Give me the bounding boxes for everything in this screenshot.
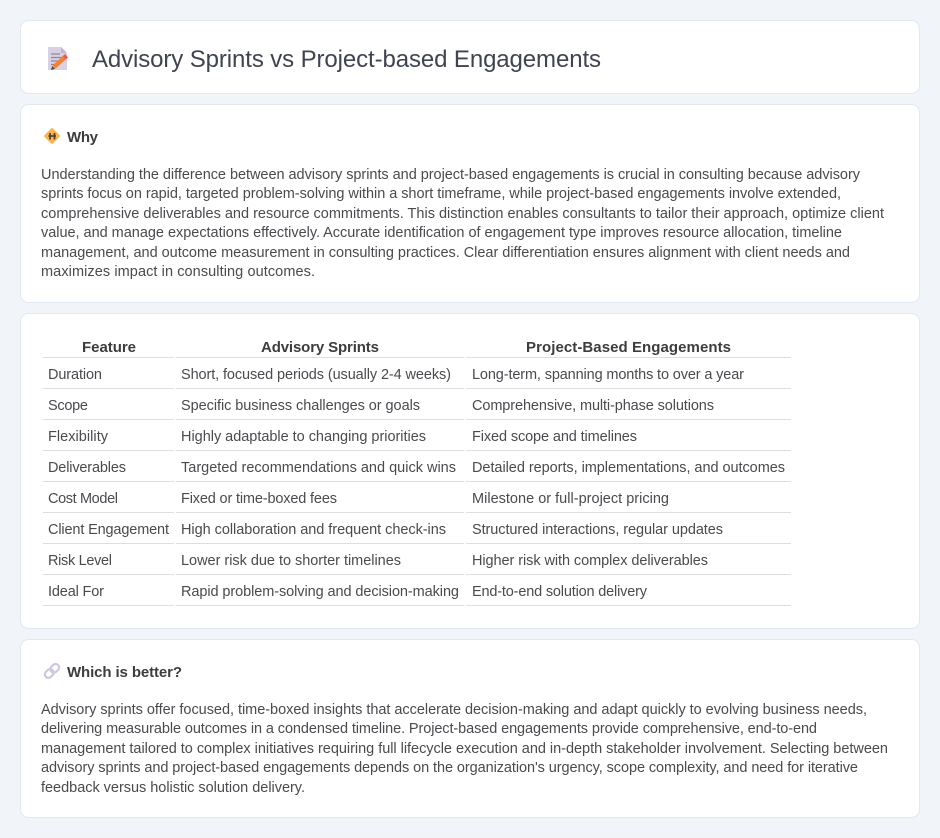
text block: which is better explanation: advisory sprints and project-based engagements depends on the organization's urgency, scope complexity, and need for iterative — [41, 760, 858, 776]
icon: chain link — [43, 662, 61, 679]
icon: warning diamond — [44, 128, 60, 144]
heading: which is better: Which is better? — [67, 664, 182, 681]
row: risk level: Risk Level — [48, 553, 112, 569]
row: risk level: Higher risk with complex deliverables — [472, 553, 708, 569]
row: cost model — [43, 491, 791, 513]
row: flexibility: Flexibility — [48, 429, 109, 445]
row: ideal for: Ideal For — [48, 584, 104, 600]
panel: which is better — [20, 640, 920, 818]
row: client engagement: Client Engagement — [48, 522, 169, 538]
row: duration: Long-term, spanning months to over a year — [472, 367, 744, 383]
row: scope: Comprehensive, multi-phase solutions — [472, 398, 714, 414]
table header row: Project-Based Engagements — [526, 339, 731, 356]
row: deliverables: Detailed reports, implementations, and outcomes — [472, 460, 785, 476]
text block: which is better explanation: Advisory sprints offer focused, time-boxed insights that accelerate decision-making and adapt quickly to evolving business needs, — [41, 702, 867, 718]
row: client engagement: Structured interactions, regular updates — [472, 522, 723, 538]
row: cost model: Milestone or full-project pricing — [472, 491, 669, 507]
row: client engagement — [43, 522, 791, 544]
title: Advisory Sprints vs Project-based Engagements — [92, 46, 601, 73]
panel: comparison table — [20, 314, 920, 628]
row: ideal for — [43, 584, 791, 606]
text block: which is better explanation: management tailored to complex initiatives requiring full lifecycle execution and in-depth stakeholder involvement. Selecting between — [41, 741, 888, 757]
text block: why explanation: comprehensive deliverables and resource commitments. This distinction enables consultants to tailor their approach, optimize client — [41, 206, 884, 222]
text block: why explanation: maximizes impact in consulting outcomes. — [41, 264, 315, 280]
text block: why explanation: management, and outcome measurement in consulting practices. Clear differentiation ensures alignment with client needs and — [41, 245, 850, 261]
row: deliverables: Targeted recommendations and quick wins — [181, 460, 456, 476]
row: duration: Short, focused periods (usually 2-4 weeks) — [181, 367, 451, 383]
row: scope — [43, 398, 791, 420]
text block: why explanation: Understanding the difference between advisory sprints and project-based engagements is crucial in consulting because advisory — [41, 167, 861, 183]
panel: header — [20, 20, 920, 94]
row: client engagement: High collaboration and frequent check-ins — [181, 522, 446, 538]
row: deliverables: Deliverables — [48, 460, 126, 476]
text block: why explanation: value, and manage expectations effectively. Accurate identification of engagement type improves resource allocation, timeline — [41, 225, 842, 241]
row: flexibility: Fixed scope and timelines — [472, 429, 637, 445]
panel: why — [20, 104, 920, 302]
table header row: Feature — [82, 339, 136, 356]
table header row — [43, 339, 791, 358]
row: flexibility — [43, 429, 791, 451]
row: deliverables — [43, 460, 791, 482]
row: flexibility: Highly adaptable to changing priorities — [181, 429, 426, 445]
row: ideal for: Rapid problem-solving and decision-making — [181, 584, 459, 600]
row: risk level: Lower risk due to shorter timelines — [181, 553, 401, 569]
table header row: Advisory Sprints — [261, 339, 379, 356]
row: cost model: Cost Model — [48, 491, 118, 507]
row: scope: Specific business challenges or goals — [181, 398, 420, 414]
row: ideal for: End-to-end solution delivery — [472, 584, 648, 600]
text block: which is better explanation: delivering measurable outcomes in a condensed timeline. Project-based engagements provide comprehensive, end-to-end — [41, 721, 817, 737]
text block: which is better explanation: feedback versus holistic solution delivery. — [41, 780, 305, 796]
row: duration: Duration — [48, 367, 102, 383]
row: scope: Scope — [48, 398, 88, 414]
row: risk level — [43, 553, 791, 575]
icon: document with pencil — [48, 47, 67, 70]
text block: why explanation: sprints focus on rapid, targeted problem-solving within a short timeframe, while project-based engagements involve extended, — [41, 186, 841, 202]
text block: why explanation — [41, 167, 884, 280]
heading: why: Why — [67, 129, 99, 146]
row: cost model: Fixed or time-boxed fees — [181, 491, 337, 507]
text block: which is better explanation — [41, 702, 888, 796]
row: duration — [43, 367, 791, 389]
